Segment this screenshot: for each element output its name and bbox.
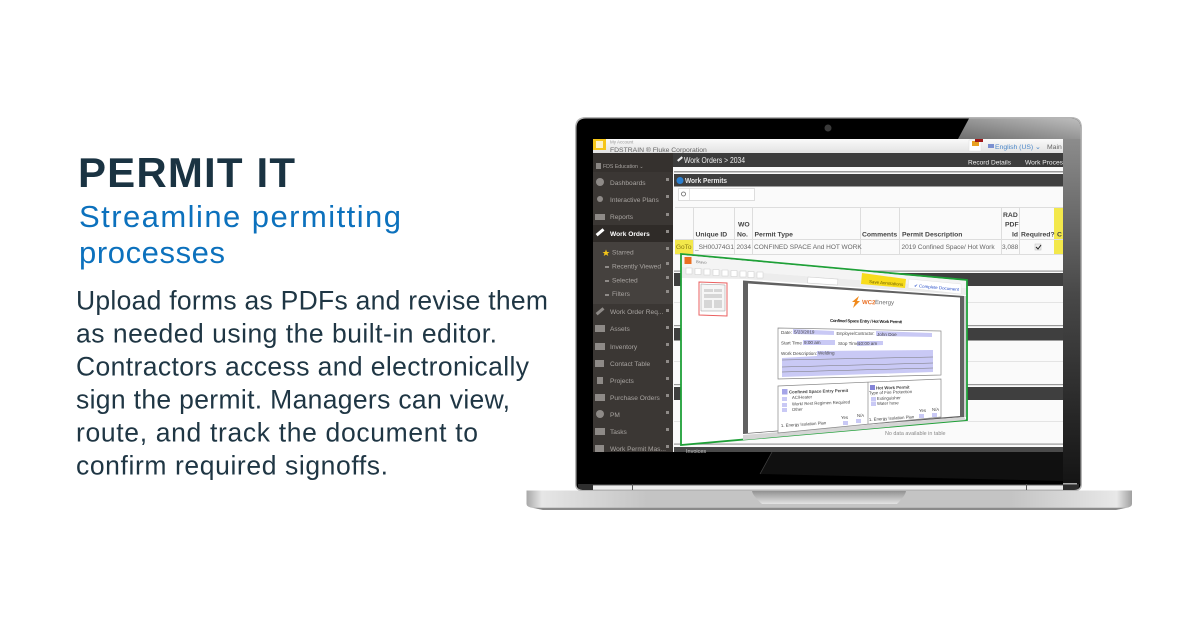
form box: permit types: 1. Energy Isolation Plan: [781, 420, 827, 428]
PDF editor overlay: [681, 254, 967, 445]
subtitle: [79, 199, 401, 270]
sidebar: Dashboards: [610, 180, 646, 187]
form box: details: Date:: [781, 330, 792, 335]
permit table: Unique ID: [696, 232, 727, 238]
sidebar: Projects: [610, 378, 635, 385]
subtitle: Streamline permitting: [79, 199, 401, 234]
body text: confirm required signoffs.: [76, 450, 388, 480]
sidebar: Selected: [612, 278, 638, 284]
form box: permit types: Work/ Rest Regimen Required: [792, 399, 851, 406]
app top bar: My Account: [610, 140, 634, 144]
body text: sign the permit. Managers can view,: [76, 384, 510, 414]
form box: permit types: Extinguisher: [877, 395, 901, 401]
permit table: 2034: [736, 244, 751, 251]
permit table: Permit Type: [754, 232, 793, 238]
sidebar: Interactive Plans: [610, 197, 659, 204]
search box: [678, 188, 754, 200]
permit table: _SH00J74G1: [694, 244, 734, 251]
permit table: RAD: [1003, 212, 1018, 219]
permit table: 3,088: [1002, 244, 1019, 251]
permit heading: Confined Space Entry / Hot Work Permit: [830, 318, 903, 324]
form box: details: Work Description:: [781, 351, 817, 356]
sidebar: Work Orders: [610, 231, 650, 238]
subtitle: processes: [79, 235, 225, 270]
body text: as needed using the built-in editor.: [76, 318, 497, 348]
form box: permit types: Type of Fire Protection: [869, 389, 913, 395]
permit table: Required?: [1021, 232, 1055, 238]
permit table: Comments: [862, 232, 897, 238]
sidebar: Work Order Req...: [610, 309, 664, 316]
editor title bar: [682, 255, 966, 288]
body text: Upload forms as PDFs and revise them: [76, 286, 548, 316]
permit table: WO: [738, 222, 750, 228]
page title bar: Record Details: [968, 160, 1012, 166]
permit table: CONFINED SPACE And HOT WORK: [754, 244, 862, 251]
form box: permit types: Water hose: [877, 400, 899, 406]
sidebar: Tasks: [610, 429, 628, 436]
work permits bar: Work Permits: [685, 178, 727, 185]
form box: details: Employee/Contractor:: [836, 331, 874, 336]
form box: permit types: N/A: [932, 407, 939, 412]
title: PERMIT IT: [78, 149, 295, 196]
collapsed section bars: Invoices: [686, 449, 706, 455]
form box: permit types: Yes: [919, 408, 926, 413]
app top bar: [593, 139, 1063, 154]
permit table: [675, 207, 1063, 255]
form box: details: Start Time: [781, 340, 802, 346]
collapsed section bars: No data available in table: [885, 431, 946, 437]
form box: permit types: 1. Energy Isolation Plan: [869, 414, 915, 422]
permit table: Id: [1012, 232, 1018, 238]
sidebar: PM: [610, 412, 620, 419]
form box: permit types: Confined Space Entry Permit: [789, 388, 849, 394]
form box: details: Stop Time: [838, 341, 859, 346]
WC2 Energy logo: WC2: [862, 300, 876, 306]
sidebar: Contact Table: [610, 361, 651, 368]
permit table: No.: [737, 232, 748, 238]
laptop lid: [575, 117, 1082, 491]
app top bar: FDSTRAIN ® Fluke Corporation: [610, 146, 707, 154]
permit table: GoTo: [676, 244, 692, 251]
form box: details: [778, 328, 941, 379]
app top bar: Main: [1047, 144, 1062, 151]
sidebar: Inventory: [610, 344, 638, 351]
sidebar: Assets: [610, 326, 630, 333]
editor toolbar: [682, 267, 966, 295]
sidebar: Work Permit Mas...: [610, 446, 666, 453]
form box: details: Welding: [818, 350, 835, 356]
sidebar: Reports: [610, 214, 634, 221]
form box: permit types: Yes: [841, 415, 848, 420]
sidebar: Filters: [612, 291, 631, 298]
page title bar: Work Orders > 2034: [684, 156, 746, 165]
form box: permit types: [778, 379, 941, 433]
body text: [76, 286, 548, 480]
page title bar: Work Proces: [1025, 160, 1064, 166]
camera: [824, 124, 832, 132]
sidebar: FDS Education ⌄: [603, 164, 644, 170]
work permits bar: [674, 174, 1063, 186]
form box: permit types: AC/Heater: [792, 394, 813, 400]
form box: permit types: Other: [792, 407, 803, 412]
collapsed section bars: [674, 270, 1063, 455]
permit table: PDF: [1005, 222, 1019, 228]
document viewer: [743, 280, 966, 440]
laptop: [526, 117, 1132, 510]
body text: route, and track the document to: [76, 418, 478, 448]
WC2 Energy logo: Energy: [875, 300, 894, 306]
form box: details: 10:00 am: [858, 341, 877, 346]
permit table: Permit Description: [902, 232, 962, 238]
thumbnail: [699, 282, 727, 316]
sidebar: Starred: [612, 250, 634, 256]
editor toolbar: ✔ Complete Document: [914, 283, 960, 292]
editor title bar: Bravo: [696, 259, 708, 265]
page title bar: [673, 153, 1064, 167]
laptop base: [526, 490, 1132, 510]
sidebar: Recently Viewed: [612, 264, 661, 270]
app top bar: English (US) ⌄: [995, 144, 1041, 151]
form box: details: John Doe: [877, 332, 897, 337]
form box: permit types: N/A: [857, 413, 864, 418]
sidebar: Purchase Orders: [610, 395, 661, 402]
form box: details: 9:00 am: [804, 340, 821, 345]
hinge strip: [578, 483, 1079, 490]
form box: details: 5/23/2019: [794, 330, 815, 334]
editor toolbar: Save Annotations: [869, 279, 904, 287]
body text: Contractors access and electronically: [76, 352, 530, 382]
form box: permit types: Hot Work Permit: [876, 385, 910, 390]
permit table: 2019 Confined Space/ Hot Work: [902, 244, 995, 251]
sidebar: [593, 153, 673, 453]
permit table: C: [1057, 232, 1062, 238]
app screen: [593, 139, 1064, 455]
WC2 Energy logo: [852, 296, 894, 308]
